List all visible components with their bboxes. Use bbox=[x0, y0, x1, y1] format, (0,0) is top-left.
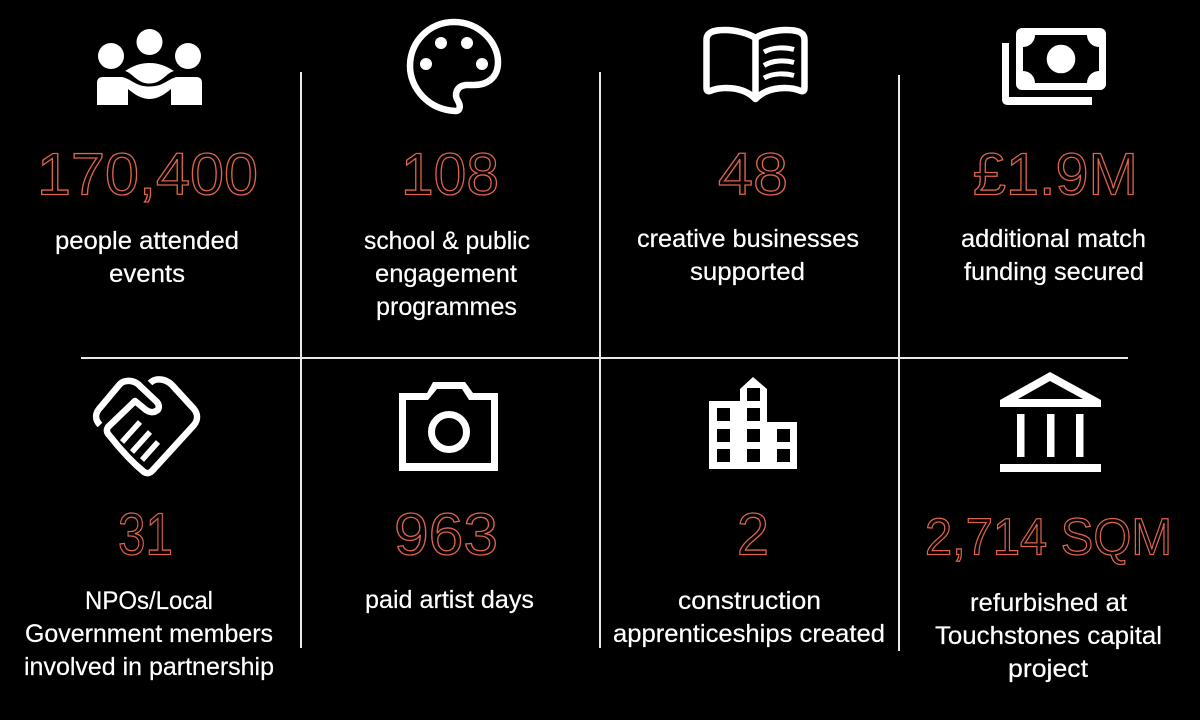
text: refurbished at Touchstones capital project: project bbox=[1008, 655, 1088, 683]
panel: refurbished space bbox=[925, 372, 1172, 683]
text: construction apprenticeships created: construction bbox=[678, 587, 821, 615]
text: school and public engagement programmes: engagement bbox=[375, 260, 517, 288]
number: 48: 48 bbox=[718, 142, 788, 208]
text: NPOs and local government members: Government members bbox=[25, 620, 273, 648]
text: additional match funding secured: funding secured bbox=[964, 258, 1144, 286]
icon: banknotes bbox=[1002, 28, 1106, 105]
number: 31: 31 bbox=[118, 502, 173, 568]
text: NPOs and local government members: NPOs/Local bbox=[85, 587, 213, 615]
number: 2: 2 bbox=[737, 502, 769, 568]
text: school and public engagement programmes: programmes bbox=[376, 293, 517, 321]
icon: handshake bbox=[96, 379, 197, 473]
text: NPOs and local government members: involved in partnership bbox=[24, 653, 274, 681]
text: refurbished at Touchstones capital project bbox=[935, 589, 1162, 683]
text: creative businesses supported bbox=[637, 225, 859, 286]
text: construction apprenticeships created: apprenticeships created bbox=[613, 620, 885, 648]
icon: open book bbox=[706, 30, 804, 99]
panel: people attended bbox=[37, 29, 258, 288]
text: people attended events: people attended bbox=[55, 227, 239, 255]
text: additional match funding secured bbox=[961, 225, 1146, 286]
panel: partnership members bbox=[24, 379, 274, 681]
panel: construction apprenticeships bbox=[613, 377, 885, 648]
panel: paid artist days bbox=[365, 382, 534, 614]
number: 170,400: 170,400 bbox=[37, 142, 258, 208]
text: creative businesses supported: creative businesses bbox=[637, 225, 859, 253]
text: people attended events: events bbox=[109, 260, 185, 288]
text: people attended events bbox=[55, 227, 239, 288]
number: 2,714 SQM: 2,714 SQM bbox=[925, 508, 1172, 566]
icon: building bbox=[709, 377, 797, 469]
panel: engagement programmes bbox=[364, 22, 530, 321]
text: school and public engagement programmes bbox=[364, 227, 530, 321]
text: NPOs and local government members bbox=[24, 587, 274, 681]
panel: match funding bbox=[961, 28, 1146, 286]
text: additional match funding secured: additional match bbox=[961, 225, 1146, 253]
icon: palette bbox=[410, 22, 498, 111]
number: 963: 963 bbox=[394, 502, 498, 568]
text: construction apprenticeships created bbox=[613, 587, 885, 648]
text: refurbished at Touchstones capital project: refurbished at bbox=[970, 589, 1127, 617]
panel: creative businesses bbox=[637, 30, 859, 286]
text: paid artist days: paid artist days bbox=[365, 586, 534, 614]
icon: classical building bbox=[1000, 372, 1101, 472]
icon: camera bbox=[399, 382, 498, 471]
text: refurbished at Touchstones capital project: Touchstones capital bbox=[935, 622, 1162, 650]
icon: people group bbox=[97, 29, 202, 105]
number: 108: 108 bbox=[401, 142, 499, 208]
text: creative businesses supported: supported bbox=[690, 258, 805, 286]
number: £1.9M: £1.9M bbox=[973, 142, 1138, 208]
text: school and public engagement programmes: school & public bbox=[364, 227, 530, 255]
